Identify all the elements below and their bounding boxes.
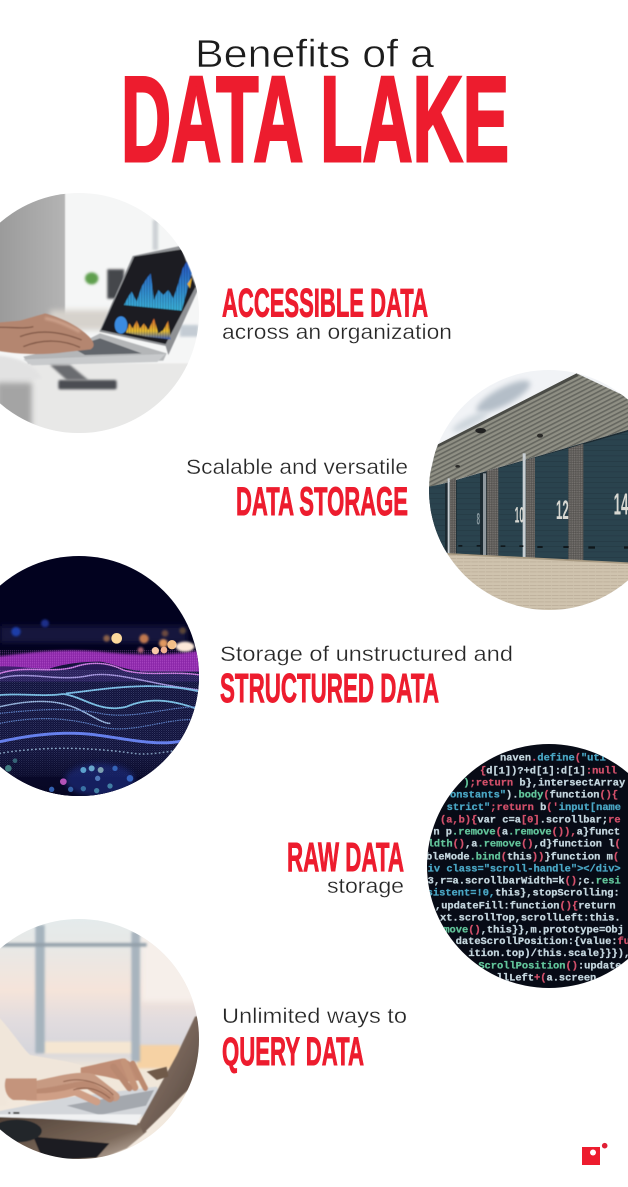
photo: source code screen: xt.scrollTop,scrollLeft:this. <box>440 912 621 924</box>
hands <box>81 1058 143 1082</box>
laptop keyboard <box>0 1087 161 1124</box>
text: data storage <box>186 456 408 524</box>
ground <box>447 554 628 610</box>
photo: source code screen: sistent=!0,this},stopScrolling: <box>427 888 620 900</box>
photo: source code screen: llLeft+(a.screen <box>497 973 596 985</box>
text: query data <box>222 1005 407 1074</box>
photo: particle waves <box>0 555 203 800</box>
photo: source code screen: n p.remove(a.remove()),a}funct <box>433 827 620 839</box>
text: accessible data <box>222 282 452 344</box>
text: structured data: Storage of unstructured and <box>220 643 513 666</box>
photo: source code screen: iv class="scroll-handle"></div> <box>428 863 621 875</box>
text: accessible data: across an organization <box>222 321 452 344</box>
text: data storage: Scalable and versatile <box>186 456 408 479</box>
mouse and stand <box>0 356 26 364</box>
photo: source code screen: onstants").body(function(){ <box>450 789 618 801</box>
doors <box>425 428 628 565</box>
title <box>121 33 509 187</box>
text: query data: QUERY DATA <box>222 1030 364 1074</box>
photo: source code screen: bleMode.bind(this))}function m( <box>426 851 619 863</box>
photo: source code screen: {d[1])?+d[1]:d[1]:null <box>480 765 617 777</box>
door numbers <box>476 494 628 524</box>
text: data storage: DATA STORAGE <box>236 480 408 524</box>
text: raw data: storage <box>327 875 404 898</box>
photo: typing at window <box>0 918 208 1168</box>
photo: source code screen: ,updateFill:function(){return <box>435 900 616 912</box>
door numbers: 12 <box>556 495 569 525</box>
photo: source code screen: ScrollPosition():update <box>478 961 622 973</box>
text: structured data <box>220 643 513 711</box>
door numbers: 10 <box>515 502 524 527</box>
pillars <box>450 478 456 554</box>
photo: source code screen: ition.top)/this.scale}}}), <box>468 948 628 960</box>
hands <box>0 313 94 354</box>
text: raw data: RAW DATA <box>287 834 404 880</box>
text: structured data: STRUCTURED DATA <box>220 665 439 711</box>
photo: source code screen: 3,r=a.scrollbarWidth=k();c.resi <box>428 875 621 887</box>
sleeve <box>0 1015 85 1079</box>
laptop base <box>23 333 167 364</box>
icon: logo <box>582 1143 608 1165</box>
photo: source code screen: ldth(),a.remove(),d}function l( <box>428 839 621 851</box>
text: raw data <box>287 834 404 898</box>
photo: laptop with dashboards <box>0 193 199 433</box>
photo: source code screen: );return b},intersectArray <box>463 777 626 789</box>
photo: source code screen: dateScrollPosition:{value:fu <box>456 936 628 948</box>
photo: source code screen: move(),this}},m.prototype=Obj <box>443 924 624 936</box>
photo: source code screen: (a,b){var c=a[0].scrollbar;re <box>440 815 621 827</box>
door numbers: 8 <box>477 509 480 528</box>
screen <box>99 246 198 355</box>
title: first line: Benefits of a <box>195 33 434 76</box>
orange bokeh lights <box>103 627 194 654</box>
text: accessible data: ACCESSIBLE DATA <box>222 282 428 326</box>
text: query data: Unlimited ways to <box>222 1005 407 1028</box>
photo: source code screen: naven.define("uti <box>500 753 606 765</box>
laptop lid <box>139 1015 203 1133</box>
photo: source code screen: strict";return b('input[name <box>447 802 621 814</box>
table and dark desk items <box>0 1116 148 1159</box>
photo: storage building <box>420 369 628 618</box>
photo: source code screen <box>425 744 628 988</box>
